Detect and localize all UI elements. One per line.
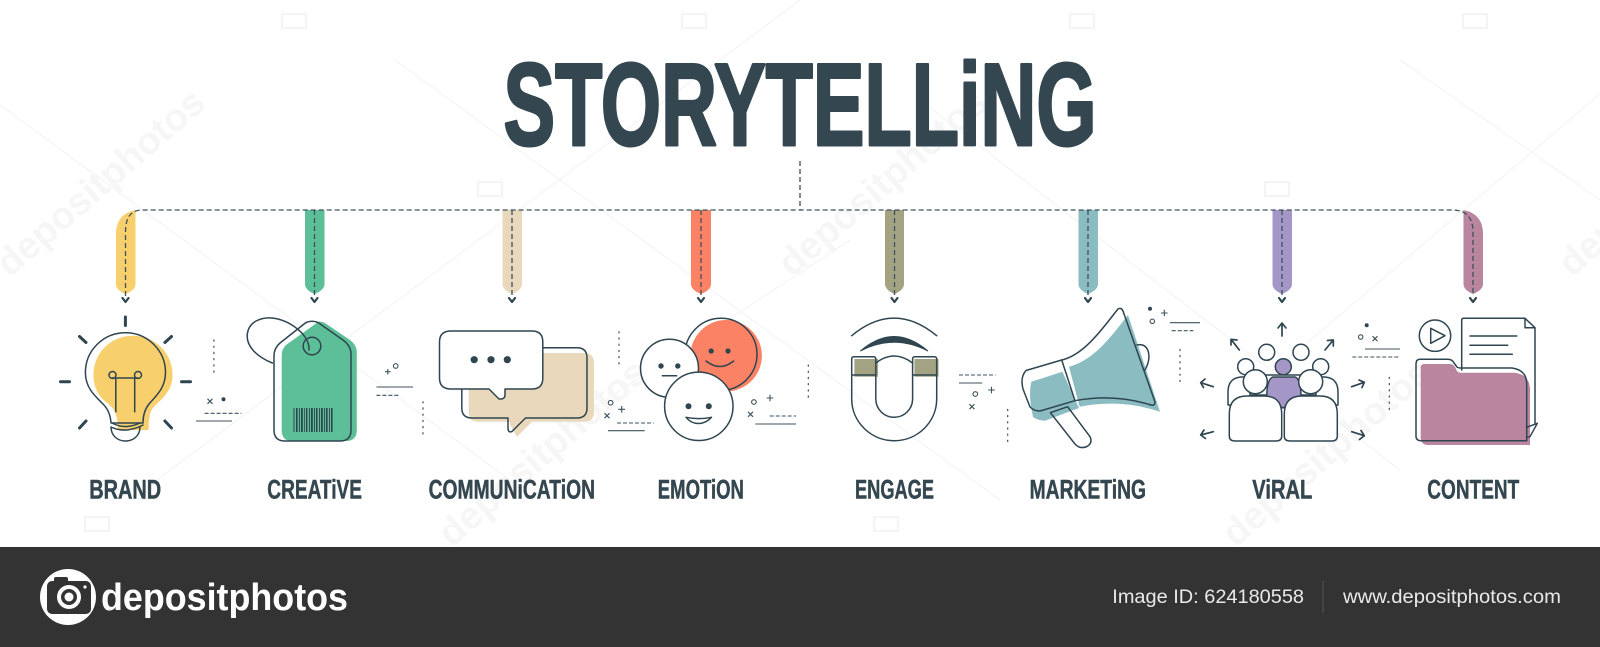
- decoration: between engage and marketing: [959, 375, 1008, 444]
- footer bar: [0, 547, 1600, 647]
- watermark: depositphotos lower right: depositphotos: [1214, 351, 1439, 555]
- title: STORYTELLiNG: [504, 39, 1096, 170]
- label: content: CONTENT: [1427, 474, 1520, 504]
- decoration: between communication and emotion: [604, 332, 654, 431]
- footer separator: [1322, 581, 1324, 613]
- icon: emotion faces: [640, 318, 762, 440]
- label: engage: ENGAGE: [855, 474, 934, 504]
- icon: speech bubbles: [440, 331, 594, 437]
- label: communication: COMMUNiCATiON: [429, 474, 595, 504]
- label: creative: CREATiVE: [267, 474, 362, 504]
- footer logo icon: [40, 569, 96, 625]
- decoration: between emotion and engage: [748, 365, 808, 424]
- dashed connector tree: [126, 161, 1473, 296]
- footer logo wordmark: depositphotos: [101, 577, 348, 619]
- label: brand: BRAND: [89, 474, 161, 504]
- coloured pills: [116, 210, 1483, 294]
- footer image id: Image ID: 624180558: [1112, 586, 1304, 608]
- label: viral: ViRAL: [1252, 474, 1312, 504]
- label: marketing: MARKETiNG: [1030, 474, 1146, 504]
- label: emotion: EMOTiON: [658, 474, 744, 504]
- icon: viral crowd: [1201, 323, 1364, 441]
- arrowheads: [122, 298, 1476, 302]
- decoration: between brand and creative: [196, 340, 242, 421]
- decoration: between marketing and viral: [1148, 307, 1200, 383]
- footer url: www.depositphotos.com: [1342, 586, 1561, 608]
- decoration: between creative and communication: [376, 364, 423, 437]
- icon: megaphone: [1022, 308, 1160, 448]
- icon: price tag: [247, 318, 357, 441]
- watermark: depositphotos centre: depositphotos: [770, 81, 995, 285]
- icon: content folder: [1416, 318, 1537, 445]
- icon: magnet: [852, 318, 938, 441]
- watermark: depositphotos lower centre: depositphotos: [430, 351, 655, 555]
- icon: light bulb: [60, 317, 190, 441]
- decoration: between viral and content: [1352, 323, 1400, 412]
